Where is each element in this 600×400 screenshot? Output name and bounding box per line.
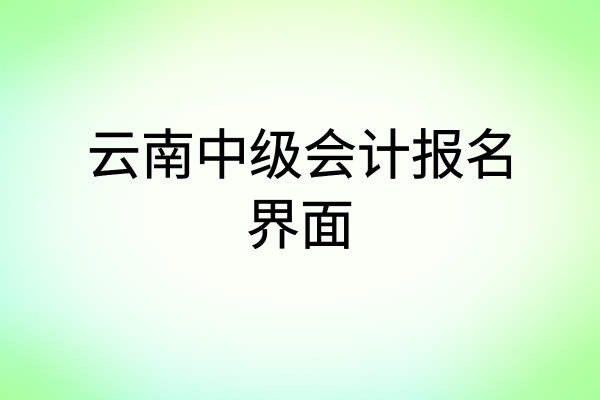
title: 界面 <box>246 196 354 256</box>
title <box>87 126 519 256</box>
title: 云南中级会计报名 <box>87 126 519 186</box>
